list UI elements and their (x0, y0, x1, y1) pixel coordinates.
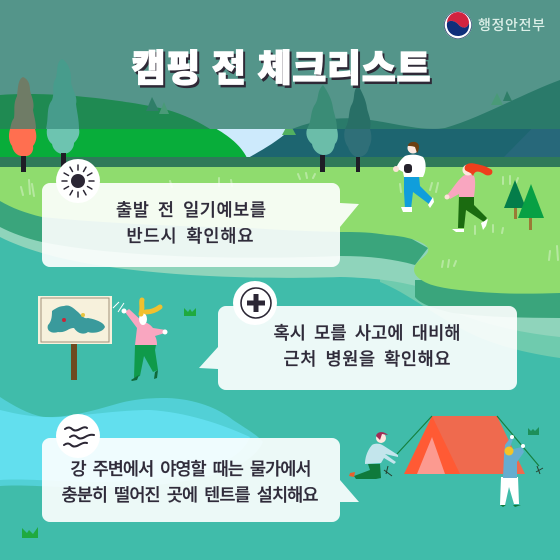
text: check weather (116, 200, 266, 246)
ground strip (0, 157, 560, 168)
white grass strokes (21, 173, 558, 267)
person: man walking (393, 142, 434, 212)
title shadow and text: 캠핑 전 체크리스트 (132, 48, 430, 89)
river bank pale band (0, 210, 560, 337)
person: man kneeling (349, 432, 398, 479)
lower river outer (0, 397, 263, 488)
grass field (0, 167, 560, 294)
tuft: right (528, 427, 539, 435)
logo text: 행정안전부 (478, 17, 545, 33)
icon: waves (56, 414, 100, 458)
dark overlay above horizon (0, 0, 560, 129)
background sky (0, 0, 560, 160)
person: woman standing (500, 435, 543, 507)
trees upper part (10, 59, 371, 129)
tuft: upper (184, 308, 196, 316)
text: tent distance: 충분히 떨어진 곳에 텐트를 설치해요 (62, 485, 318, 505)
text: check hospital: 혹시 모를 사고에 대비해 (274, 323, 460, 343)
title shadow and text: 캠핑 전 체크리스트 (134, 50, 432, 92)
tree trunks (21, 153, 360, 172)
text: tent distance: 강 주변에서 야영할 때는 물가에서 (70, 459, 312, 479)
bubble 1: weather (42, 183, 359, 267)
river base (0, 168, 560, 560)
icon: sun (56, 159, 100, 203)
person: woman pointing at sign (113, 300, 168, 381)
distant hills (0, 80, 560, 160)
icon: plus (233, 281, 277, 325)
river bank lower band (380, 270, 560, 358)
river bank dark band right (415, 280, 560, 318)
text: check hospital (274, 323, 460, 369)
person: woman running (444, 163, 492, 232)
text: check weather: 반드시 확인해요 (126, 226, 254, 246)
lower river inner (0, 410, 250, 482)
text: tent distance (62, 459, 318, 505)
text: check hospital: 근처 병원을 확인해요 (284, 349, 450, 369)
trees lower part (9, 129, 371, 157)
signboard map (38, 296, 112, 380)
bubble 2: hospital (199, 306, 517, 390)
river bank dark band left (0, 195, 428, 265)
bubble 3: river (42, 438, 359, 522)
tent (397, 416, 539, 474)
conifer pair (504, 180, 544, 230)
logo: Korean government taegeuk (444, 11, 472, 39)
tuft: lower left (22, 527, 38, 538)
text: check weather: 출발 전 일기예보를 (116, 200, 266, 220)
